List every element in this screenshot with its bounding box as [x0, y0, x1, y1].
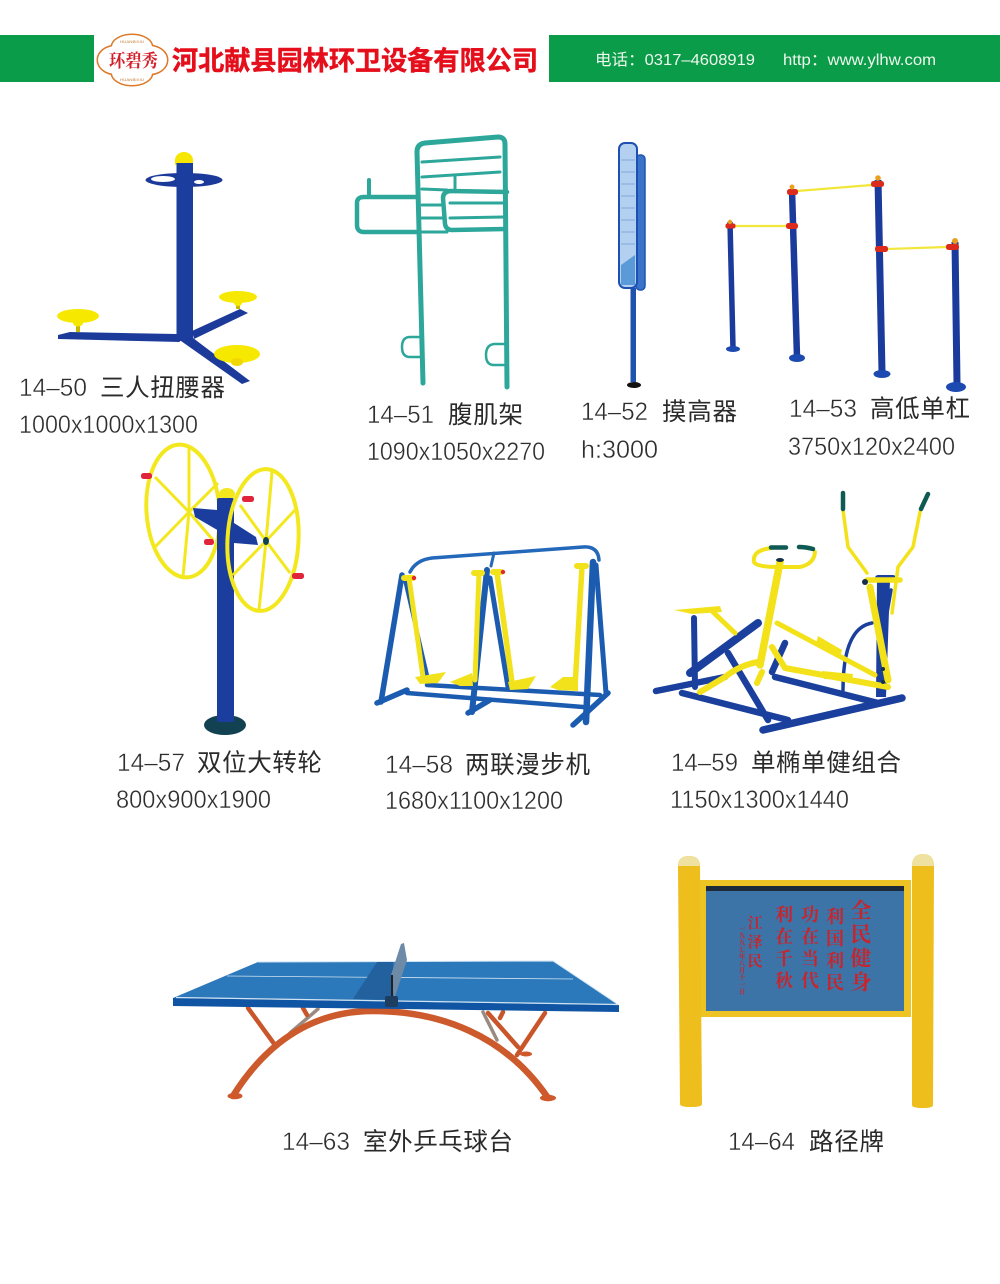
label: 14-50: 14–50 — [19, 374, 87, 402]
label: 14-64: 路径牌 — [809, 1123, 884, 1158]
label: 14-63 — [282, 1123, 513, 1158]
icon: path sign — [678, 854, 934, 1108]
product 14-64 path sign — [678, 854, 934, 1158]
calligraphy: 全民健身 — [846, 899, 876, 995]
label: 14-57: 14–57 — [117, 749, 185, 777]
left green bar — [0, 35, 94, 82]
icon: height touch board — [619, 143, 645, 388]
label: 14-59: 1150x1300x1440 — [670, 786, 849, 814]
icon: rower and elliptical — [656, 493, 928, 730]
label: 14-52: 14–52 — [581, 398, 648, 426]
right green bar — [549, 35, 1000, 82]
label: 14-57: 双位大转轮 — [197, 744, 322, 779]
label: 14-50: 三人扭腰器 — [100, 369, 225, 404]
net — [353, 962, 393, 1000]
label: 14-51: 1090x1050x2270 — [367, 438, 545, 466]
label: 14-59: 单椭单健组合 — [751, 744, 901, 779]
product 14-59 combined rower and elliptical — [656, 493, 928, 814]
label: 14-58: 1680x1100x1200 — [385, 787, 563, 815]
calligraphy: 江泽民 — [744, 915, 766, 972]
label: 14-52: 摸高器 — [662, 393, 737, 428]
label: 14-50 — [19, 369, 225, 439]
product 14-52 height touch board — [581, 143, 737, 464]
label: 14-53 — [788, 390, 970, 461]
label: 14-64 — [728, 1123, 884, 1158]
company name: 河北献县园林环卫设备有限公司 — [172, 39, 538, 78]
table legs — [233, 1008, 548, 1098]
table top — [173, 961, 618, 1005]
calligraphy: 利在千秋 — [771, 905, 797, 993]
logo: HUANBIXIU — [120, 77, 144, 82]
label: 14-57 — [116, 744, 322, 814]
phone number: 电话：0317–4608919 — [595, 51, 755, 69]
left post — [678, 856, 702, 1107]
website: http：www.ylhw.com — [783, 52, 936, 69]
label: 14-63: 14–63 — [282, 1128, 350, 1156]
icon: table tennis table — [173, 943, 619, 1101]
icon: double big wheel — [141, 442, 304, 735]
label: 14-64: 14–64 — [728, 1128, 795, 1156]
product 14-63 outdoor table tennis table — [173, 943, 619, 1158]
left wheel — [142, 442, 224, 580]
label: 14-52: h:3000 — [581, 436, 658, 464]
label: 14-53: 高低单杠 — [870, 390, 970, 425]
label: 14-52 — [581, 393, 737, 464]
label: 14-63: 室外乒乓球台 — [363, 1123, 513, 1158]
product 14-53 high and low bars — [726, 175, 970, 461]
icon: high and low bars — [726, 175, 966, 392]
label: 14-51: 14–51 — [367, 401, 434, 429]
product 14-50 three-person waist twister — [19, 152, 260, 439]
header banner — [0, 35, 1000, 85]
calligraphy: 一九九七年八月十一日 — [738, 925, 746, 996]
product 14-57 double big wheel — [116, 442, 322, 814]
calligraphy: 利国利民 — [822, 907, 848, 995]
label: 14-58 — [385, 746, 590, 815]
icon: waist twister — [57, 152, 260, 384]
calligraphy: 功在当代 — [797, 905, 823, 993]
product 14-51 abdominal frame — [357, 137, 545, 466]
logo: HUANBIXIU — [120, 39, 144, 44]
label: 14-57: 800x900x1900 — [116, 786, 271, 814]
logo: 环碧秀 — [109, 47, 158, 73]
calligraphy — [738, 899, 876, 996]
logo — [98, 35, 167, 85]
label: 14-50: 1000x1000x1300 — [19, 411, 198, 439]
label: 14-58: 14–58 — [385, 751, 453, 779]
label: 14-53: 3750x120x2400 — [788, 433, 955, 461]
label: 14-59: 14–59 — [671, 749, 738, 777]
right wheel — [224, 467, 302, 613]
label: 14-51: 腹肌架 — [448, 396, 523, 431]
label: 14-58: 两联漫步机 — [465, 746, 590, 781]
label: 14-59 — [670, 744, 901, 814]
icon: abdominal frame — [357, 137, 507, 387]
label: 14-53: 14–53 — [789, 395, 857, 423]
label: 14-51 — [367, 396, 545, 466]
right post — [912, 854, 934, 1108]
icon: double air walker — [377, 547, 608, 725]
product 14-58 double air walker — [377, 547, 608, 815]
